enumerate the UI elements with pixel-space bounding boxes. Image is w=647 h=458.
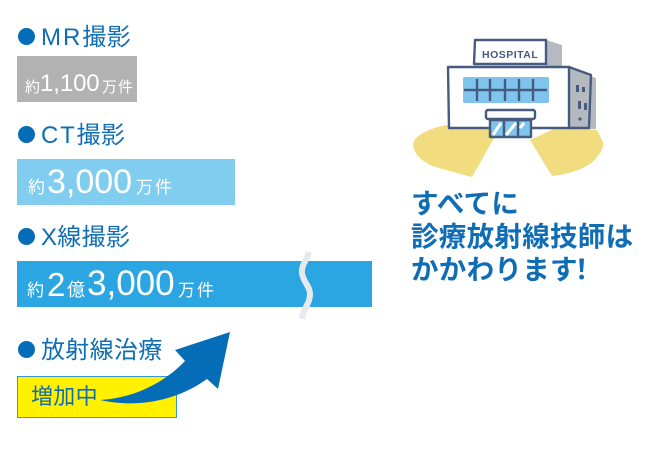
box: increasing: [17, 376, 177, 418]
box: increasing: 増加中: [31, 384, 98, 409]
text: caption: 診療放射線技師は: [411, 221, 633, 252]
bar: CT count: [17, 159, 235, 205]
bar: CT count: 3,000: [47, 163, 132, 201]
icon: yellow ground: [413, 125, 603, 177]
bar: CT count: 万件: [136, 178, 174, 197]
heading: radiotherapy: 放射線治療: [41, 337, 162, 364]
heading: MR: MR撮影: [41, 24, 131, 51]
text: caption: すべてに: [411, 188, 519, 219]
bar: CT count: 約: [28, 178, 45, 197]
illustration: hospital: [413, 38, 604, 177]
bar break mark: [298, 251, 313, 320]
bar: X-ray count: 3,000: [87, 264, 175, 303]
bar: X-ray count: 億: [67, 280, 85, 300]
text: caption: かかわります！: [411, 254, 596, 285]
sign text: HOSPITAL: [482, 49, 538, 61]
heading: X-ray: X線撮影: [41, 224, 130, 251]
bar: X-ray count: [17, 261, 372, 307]
bar: MR count: 約: [25, 79, 40, 96]
bar: X-ray count: 2: [47, 266, 65, 303]
bar: X-ray count: 約: [27, 281, 44, 300]
text: caption: [411, 188, 633, 285]
bar: MR count: 1,100: [40, 70, 100, 97]
bar: MR count: 万件: [102, 79, 134, 96]
arrow: upward: [100, 332, 230, 404]
icon: side windows: [576, 85, 587, 121]
icon: building: [448, 40, 596, 137]
bar: MR count: [17, 56, 137, 102]
heading: CT: CT撮影: [41, 122, 125, 149]
bar: X-ray count: 万件: [178, 281, 216, 300]
